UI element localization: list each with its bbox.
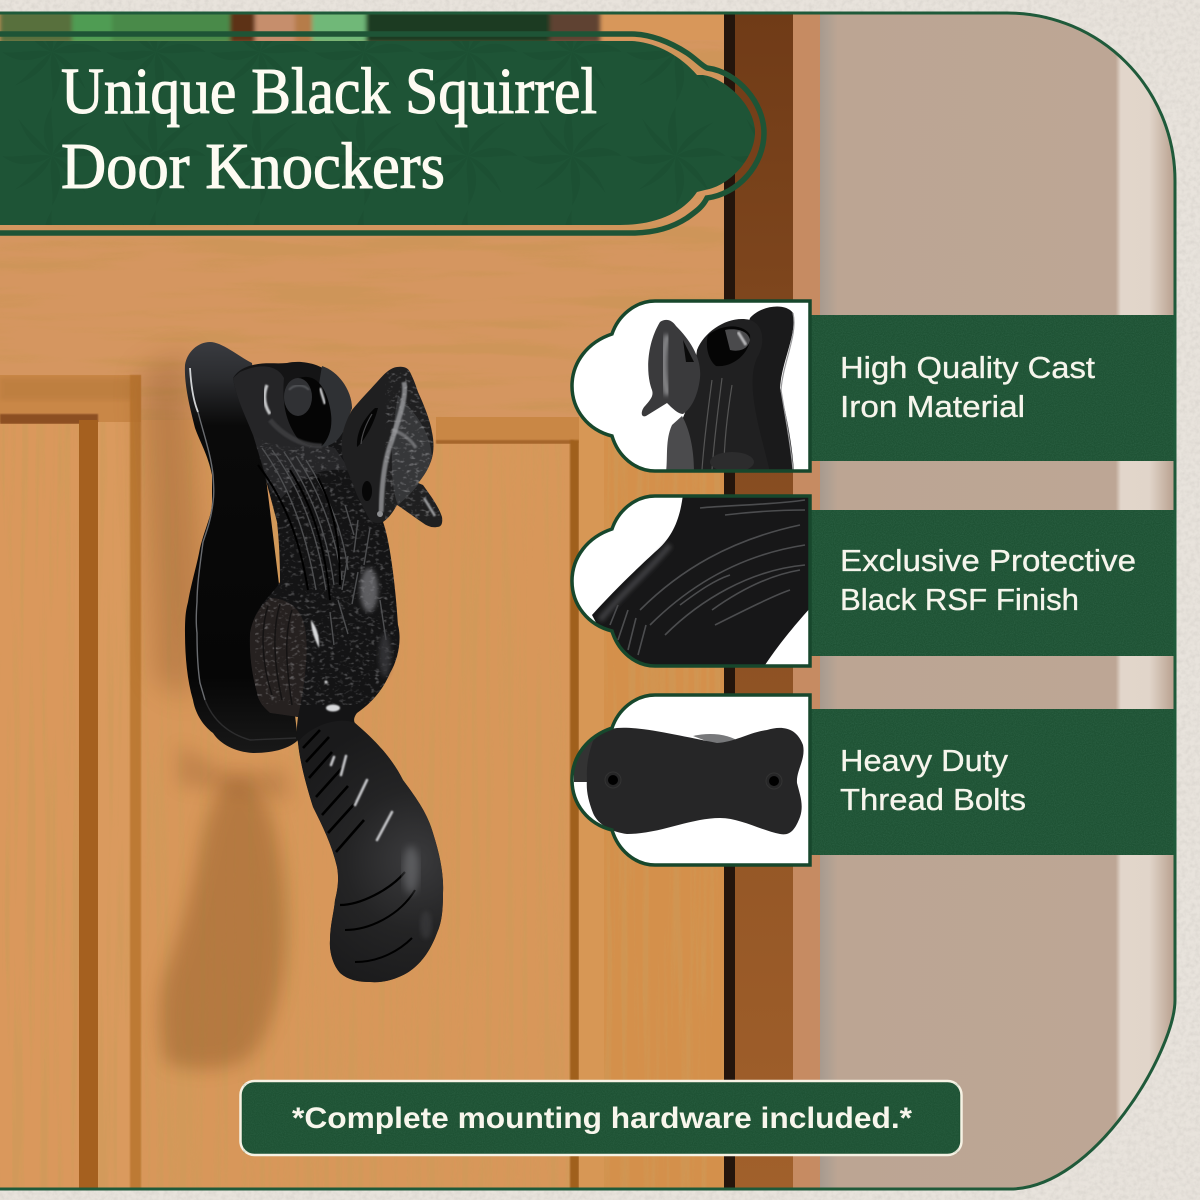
feature 3 <box>572 695 1174 865</box>
feature 3 bar <box>810 709 1174 855</box>
feature 1 thumbnail <box>572 301 810 472</box>
door knocker cast shadow <box>140 350 290 1069</box>
fine cast texture <box>255 440 400 705</box>
feature 3 text: Thread Bolts <box>840 782 1026 817</box>
nostril <box>362 481 372 501</box>
feature 1 text: Iron Material <box>840 389 1025 424</box>
feature 3 thumbnail <box>572 695 810 865</box>
feature 3 text <box>840 743 1026 817</box>
main squirrel door knocker <box>185 342 445 982</box>
banner outer outline <box>0 34 764 233</box>
eye <box>357 408 378 447</box>
backplate <box>185 342 298 753</box>
title line 1: Unique Black Squirrel <box>61 55 597 128</box>
feature 2 thumbnail <box>572 494 812 668</box>
door edge and frame <box>724 13 1174 1189</box>
feature 1 <box>572 301 1174 472</box>
body and tail <box>233 362 443 982</box>
footer note pill <box>240 1081 962 1155</box>
feature 1 text <box>840 350 1095 424</box>
fur strokes <box>262 448 386 645</box>
banner body <box>0 41 755 225</box>
feature 3 text: Heavy Duty <box>840 743 1009 778</box>
ear sheen <box>424 498 435 516</box>
feature 2 bar <box>810 510 1174 656</box>
left door panel moulding <box>0 375 141 1189</box>
paw hole and ball <box>233 366 352 447</box>
squirrel shaded details <box>250 432 443 982</box>
centre door panel <box>436 417 724 1188</box>
ridge highlight <box>381 382 405 512</box>
tail shading <box>298 721 443 982</box>
title banner <box>0 34 764 233</box>
footer note pill: *Complete mounting hardware included.* <box>292 1102 912 1135</box>
feature 1 text: High Quality Cast <box>840 350 1095 385</box>
belly gloss <box>360 568 391 677</box>
haunch <box>250 598 307 717</box>
wood door base <box>0 13 730 1189</box>
cheek sheen <box>392 395 432 505</box>
tail stripes <box>303 730 415 962</box>
window view at top <box>0 14 603 41</box>
tail gloss <box>331 756 392 840</box>
upper back grey band <box>253 432 350 500</box>
banner pattern <box>0 41 755 225</box>
feature 2 text: Exclusive Protective <box>840 543 1136 578</box>
feature 2 text: Black RSF Finish <box>840 582 1079 617</box>
feature 1 bar <box>810 315 1174 461</box>
title line 2: Door Knockers <box>61 130 445 203</box>
feature 2 <box>572 494 1174 668</box>
feature 2 text <box>840 543 1136 617</box>
head <box>342 367 445 527</box>
